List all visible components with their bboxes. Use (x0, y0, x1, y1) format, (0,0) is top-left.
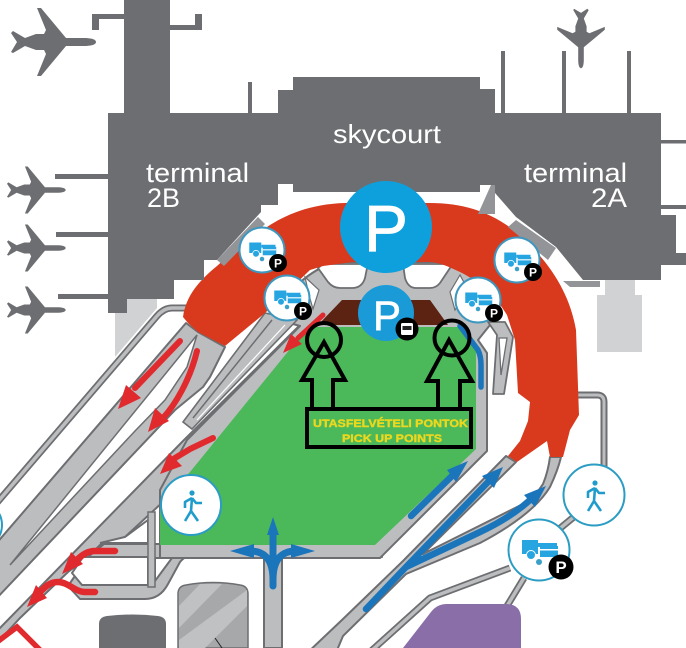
pick-up points label box: UTASFELVÉTELI PONTOK (313, 417, 468, 430)
red traffic arrows (0, 315, 323, 648)
green area (160, 327, 476, 545)
truck parking marker, large (508, 520, 574, 580)
aeroplanes (7, 8, 605, 333)
purple building (403, 604, 521, 648)
red car park arc (183, 203, 579, 462)
truck parking marker, large: P (555, 558, 567, 577)
terminal labels (146, 119, 627, 213)
brown drop-off area (318, 300, 448, 325)
white ovals in hub (305, 264, 468, 310)
truck parking marker 4 (456, 278, 503, 322)
lower right forked road (305, 456, 561, 648)
striped building (178, 582, 248, 648)
V-shaped ramp (488, 322, 513, 394)
large parking sign: P (364, 191, 408, 265)
annotation: pick-up circles and arrows (302, 320, 472, 407)
vertical link road (148, 512, 155, 587)
pick-up points label box (307, 409, 471, 447)
truck parking marker 1: P (274, 256, 282, 270)
truck parking marker 2 (264, 276, 312, 320)
truck parking marker 4: P (490, 306, 498, 320)
truck parking marker 3 (494, 238, 542, 282)
truck parking marker 3: P (529, 266, 537, 280)
truck parking marker 2: P (299, 304, 307, 318)
pick-up points label box: PICK UP POINTS (342, 433, 442, 445)
terminal labels: 2B (147, 183, 180, 213)
terminal labels: 2A (591, 183, 627, 213)
white insets of lower road junction (72, 520, 172, 585)
pedestrian marker, left (161, 475, 221, 535)
large parking sign (340, 181, 432, 273)
blue traffic arrows (230, 326, 546, 609)
terminal building (55, 0, 686, 313)
narrow strip road (183, 313, 297, 429)
grey connector strips (217, 185, 600, 287)
forked road from car park (0, 323, 225, 600)
light grey outbuildings (115, 280, 642, 357)
terminal labels: skycourt (333, 119, 442, 149)
small parking sign with bus badge (358, 285, 418, 341)
cyan marker at left edge (0, 501, 2, 549)
hub road (160, 262, 490, 558)
small parking sign with bus badge: P (373, 292, 401, 339)
pedestrian marker, right (564, 464, 624, 526)
dark grey building (99, 614, 166, 648)
truck parking marker 1 (240, 228, 287, 272)
service road, far left (0, 308, 188, 505)
thin link roads, lower right (370, 395, 604, 648)
main road, lower left (0, 325, 382, 648)
white wedge in forked road (10, 335, 197, 565)
white slit in ramp (499, 338, 507, 375)
terminal labels: terminal (524, 158, 627, 188)
terminal labels: terminal (146, 158, 249, 188)
